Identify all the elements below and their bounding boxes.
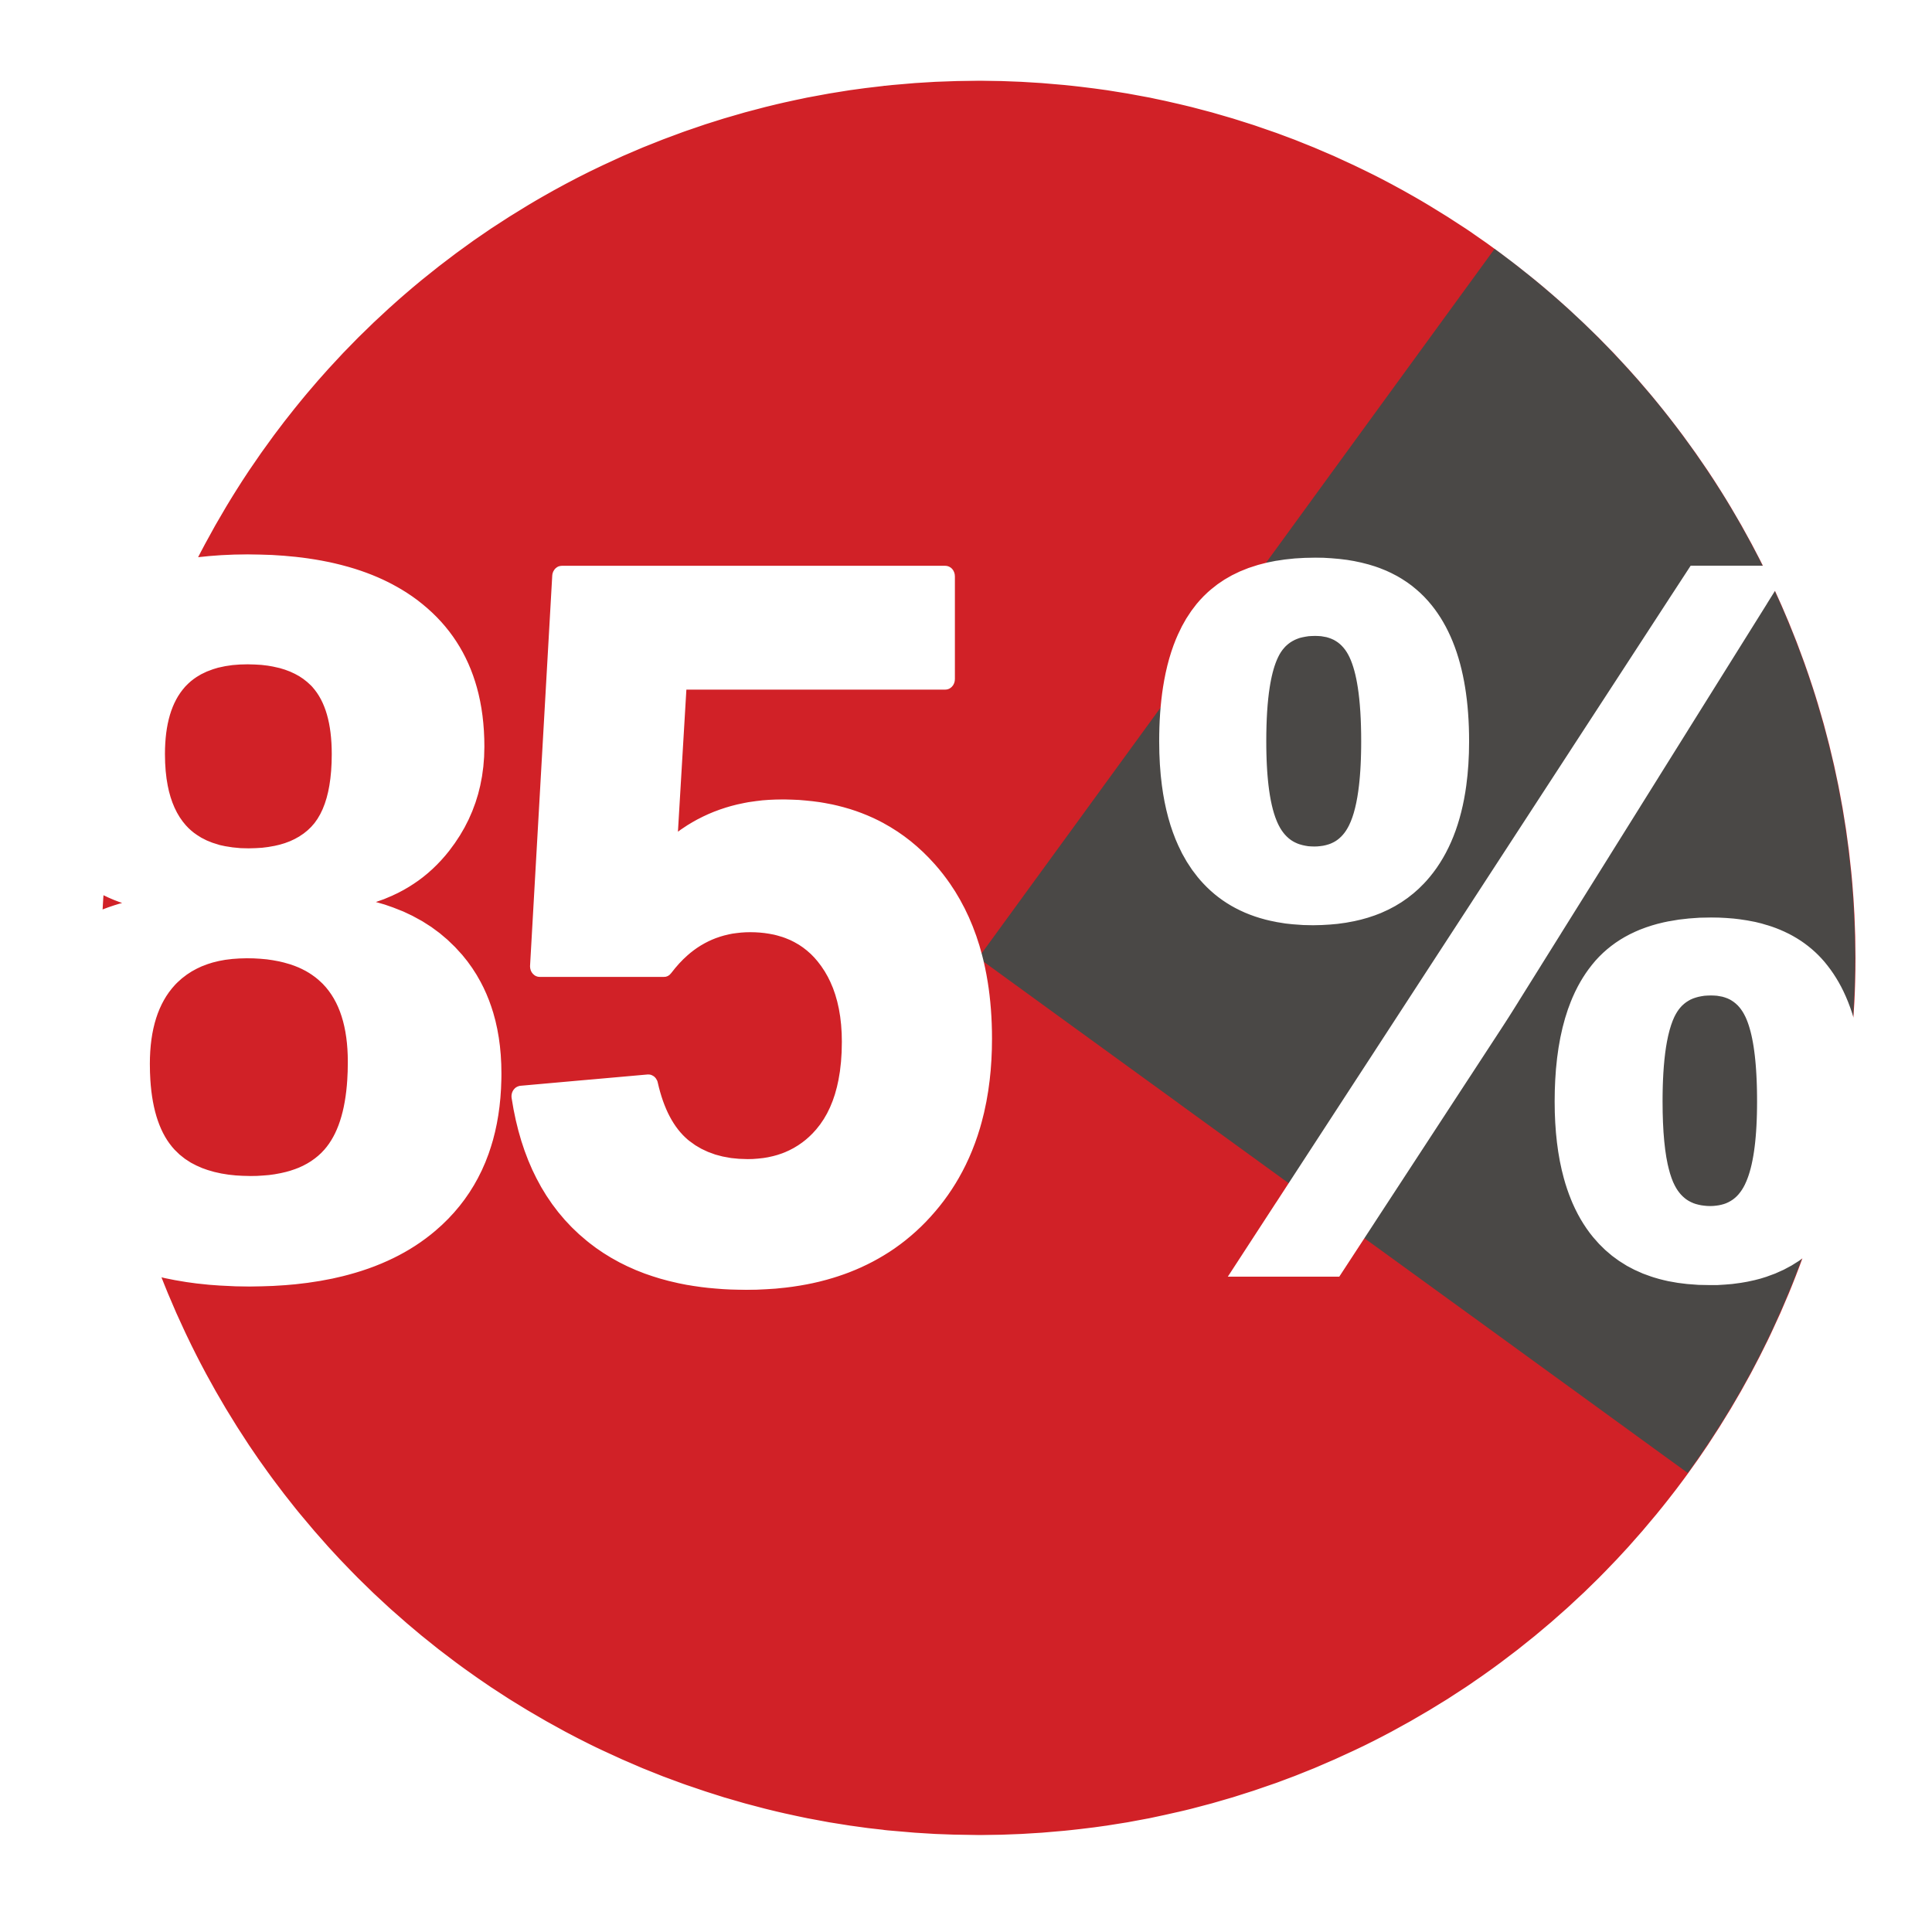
pie slice: dark grey 15 percent bbox=[978, 249, 1855, 1473]
percent sign: % bbox=[1129, 547, 1877, 1439]
label: 85% bbox=[101, 554, 1853, 1290]
digit 5: 5 bbox=[492, 358, 1009, 1484]
percent sign: % bbox=[1148, 400, 1896, 1291]
